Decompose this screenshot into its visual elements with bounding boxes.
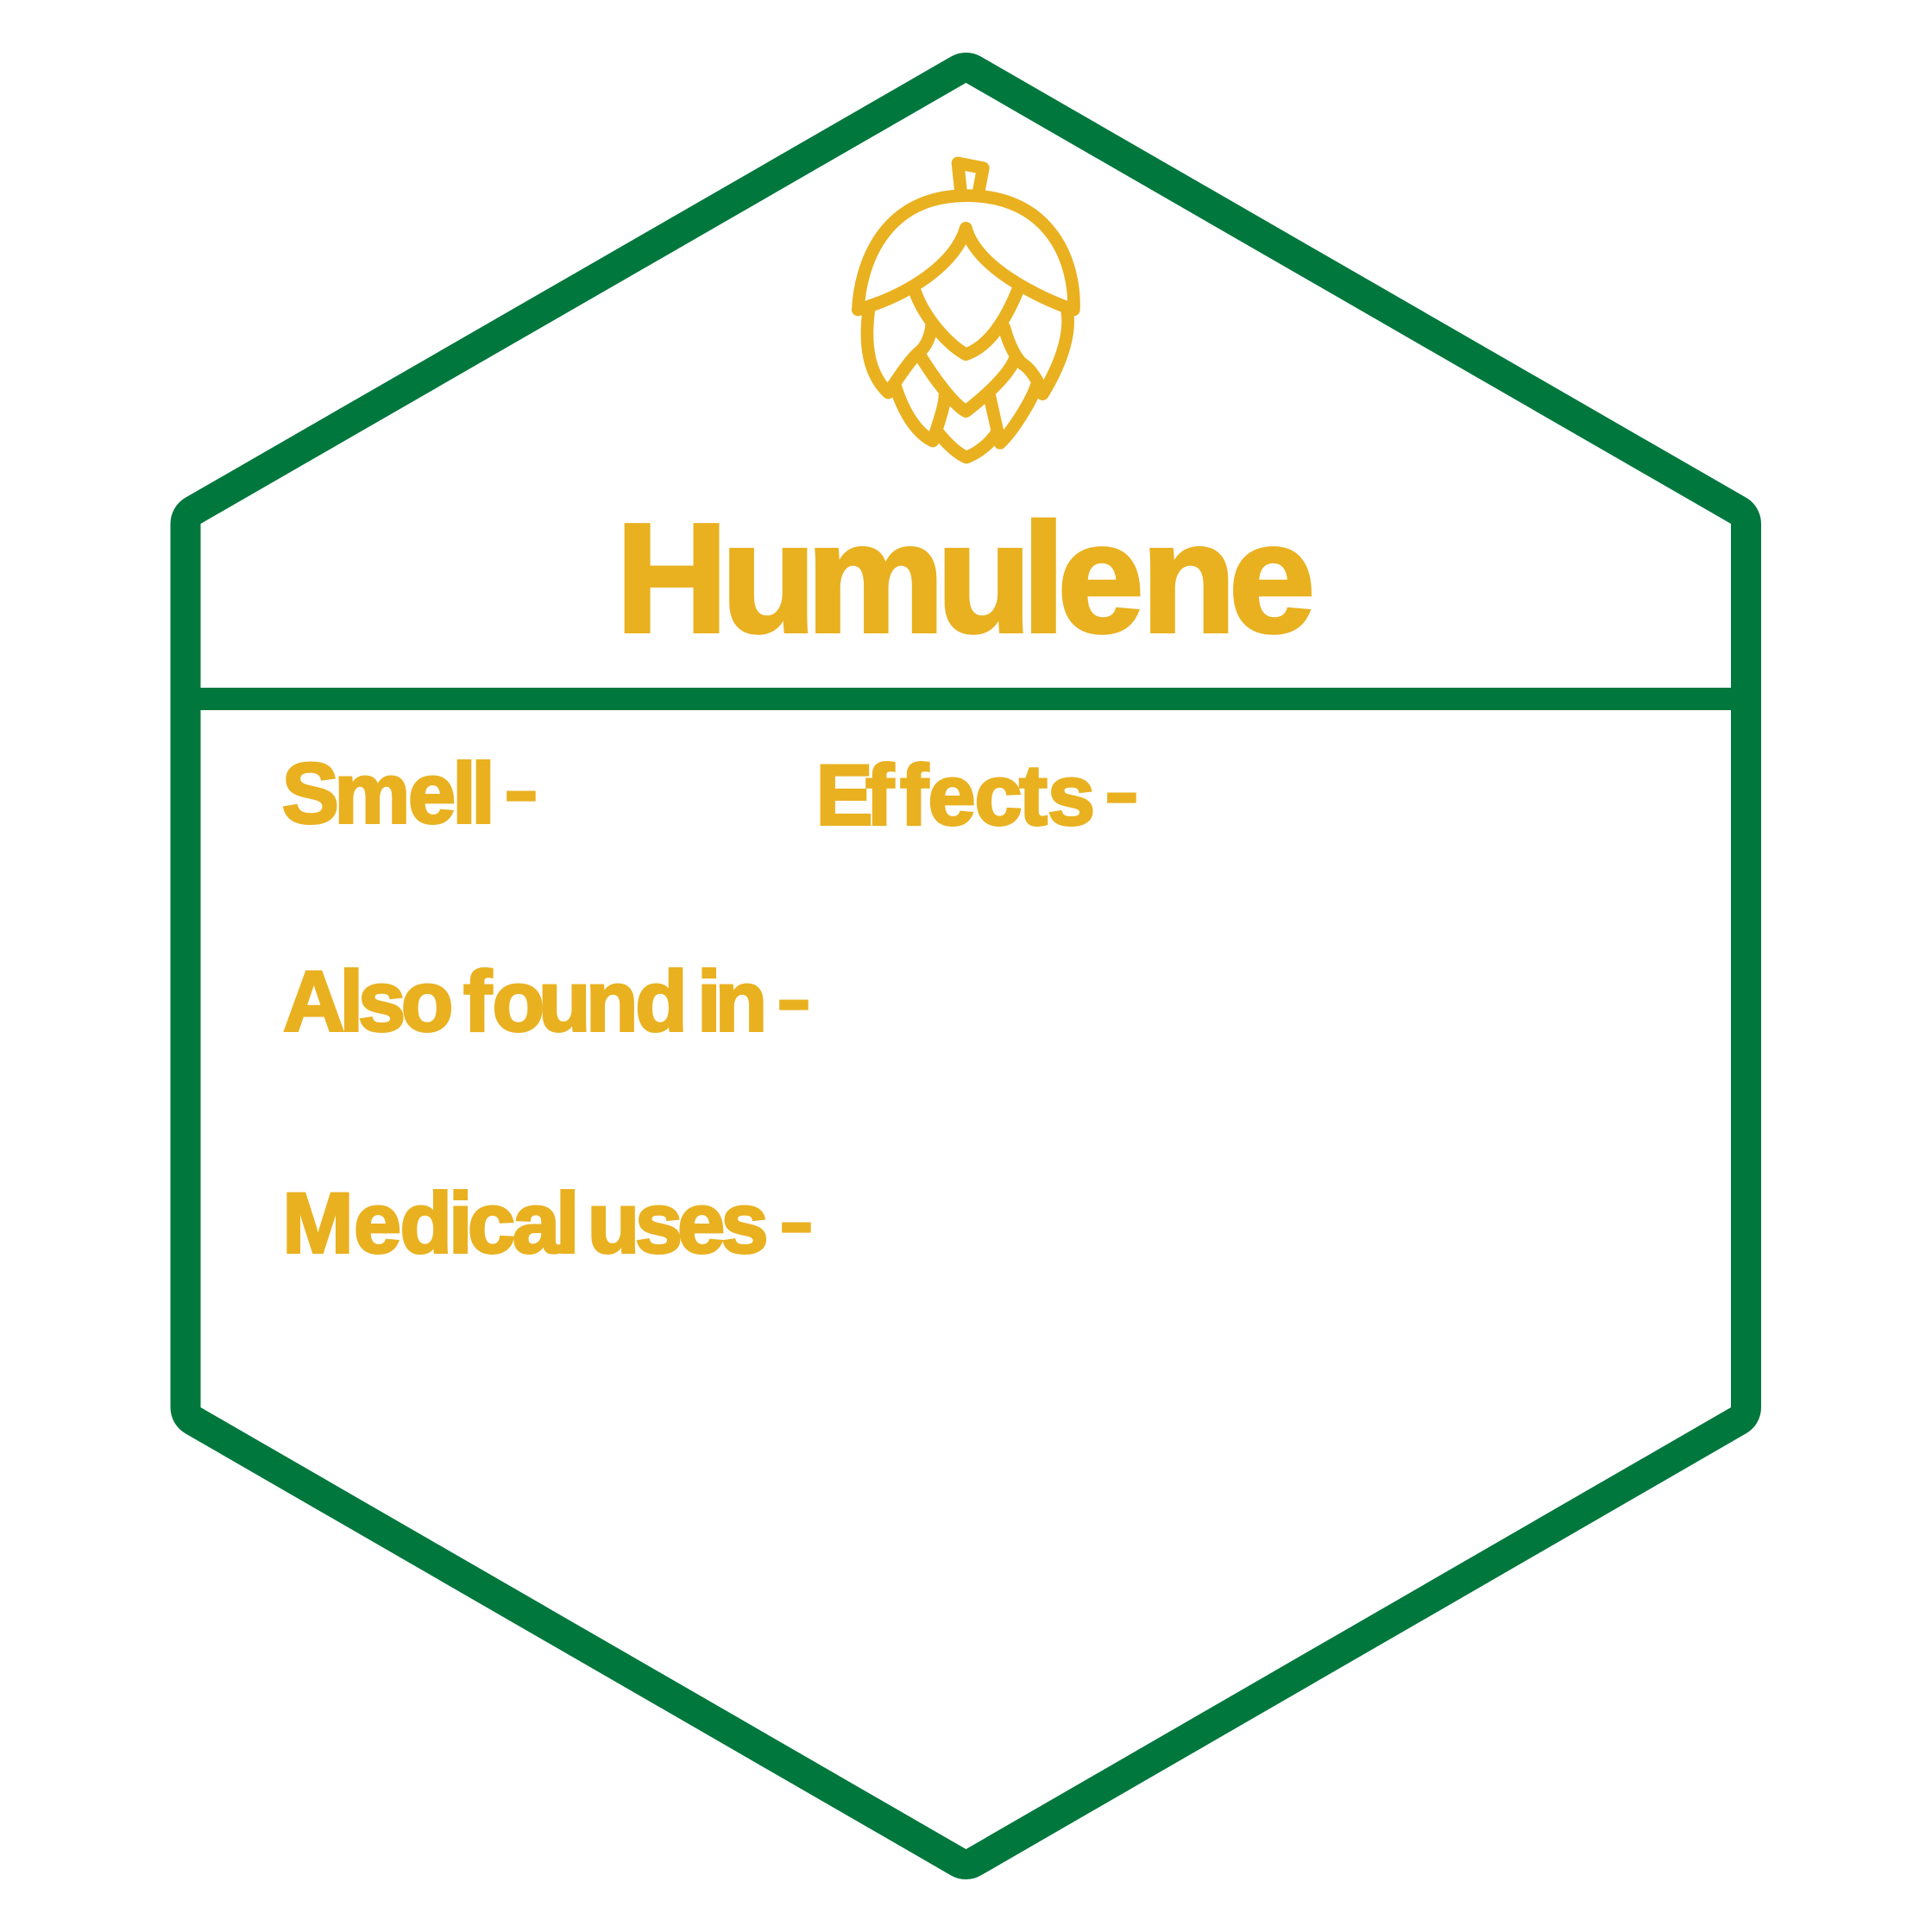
label: smell: - xyxy=(502,739,540,838)
label: effects: Effects xyxy=(816,747,1095,842)
divider bar xyxy=(200,688,1731,710)
title: Humulene xyxy=(616,492,1315,665)
label: effects: - xyxy=(1103,741,1141,840)
label: medical uses: - xyxy=(777,1171,815,1269)
icon: hop cone xyxy=(858,163,1073,457)
panel: hexagon frame xyxy=(200,83,1731,1849)
label: smell: Smell xyxy=(282,746,495,840)
label: medical uses: Medical uses xyxy=(282,1175,769,1270)
label: also found in: - xyxy=(775,948,813,1047)
label: also found in: Also found in xyxy=(283,953,767,1049)
